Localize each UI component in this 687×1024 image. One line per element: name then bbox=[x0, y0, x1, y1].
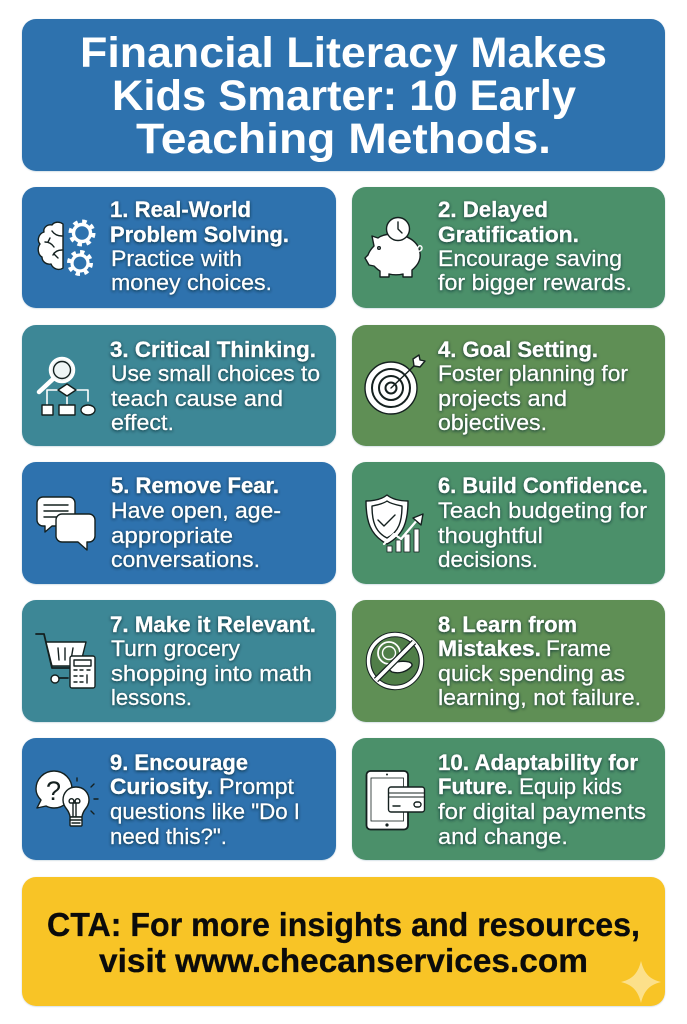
heading: Gratification. bbox=[438, 222, 579, 247]
panel: 2 delayed gratification bbox=[352, 187, 665, 308]
body text: thoughtful bbox=[438, 523, 543, 548]
body text bbox=[111, 361, 320, 435]
body text: lessons. bbox=[111, 685, 192, 710]
body text: questions like "Do I bbox=[110, 799, 300, 824]
body text: Frame bbox=[546, 636, 611, 661]
body text: Teach budgeting for bbox=[438, 498, 648, 523]
panel: 6 build confidence bbox=[352, 462, 665, 584]
body text: conversations. bbox=[111, 547, 260, 572]
panel: call to action bbox=[22, 877, 665, 1006]
heading: Problem Solving. bbox=[110, 222, 289, 247]
body text: Practice with bbox=[111, 246, 242, 271]
body text bbox=[111, 636, 312, 710]
panel: 9 encourage curiosity bbox=[22, 738, 336, 860]
body text: for digital payments bbox=[438, 799, 646, 824]
body text: Equip kids bbox=[519, 774, 622, 799]
body text bbox=[438, 636, 641, 710]
heading: 6. Build Confidence. bbox=[438, 473, 648, 498]
heading bbox=[438, 612, 577, 661]
title: Financial Literacy Makes bbox=[80, 29, 607, 77]
body text: Encourage saving bbox=[438, 246, 622, 271]
body text: appropriate bbox=[111, 523, 233, 548]
body text: money choices. bbox=[111, 270, 272, 295]
body text: and change. bbox=[438, 824, 568, 849]
body text: Use small choices to bbox=[111, 361, 320, 386]
heading: 10. Adaptability for bbox=[438, 750, 638, 775]
body text bbox=[438, 774, 646, 849]
title bbox=[80, 29, 607, 163]
body text: Prompt bbox=[219, 774, 295, 799]
title: Kids Smarter: 10 Early bbox=[112, 72, 576, 120]
panel: 4 goal setting bbox=[352, 325, 665, 446]
icon: question bubble and light bulb: ? bbox=[46, 776, 61, 806]
body text: effect. bbox=[111, 410, 174, 435]
icon: shield with check and bar chart bbox=[366, 495, 423, 552]
body text bbox=[111, 498, 281, 572]
icon: sparkle bbox=[621, 961, 661, 1003]
heading: 9. Encourage bbox=[110, 750, 248, 775]
call to action text: visit www.checanservices.com bbox=[99, 943, 588, 980]
icon: question bubble and light bulb bbox=[36, 771, 98, 826]
panel: 10 adaptability for future bbox=[352, 738, 665, 860]
title: Teaching Methods. bbox=[136, 115, 551, 163]
body text: objectives. bbox=[438, 410, 547, 435]
heading: 5. Remove Fear. bbox=[111, 473, 279, 498]
body text: projects and bbox=[438, 386, 567, 411]
body text bbox=[438, 361, 629, 435]
body text: need this?". bbox=[110, 824, 227, 849]
panel: 3 critical thinking bbox=[22, 325, 336, 446]
body text bbox=[438, 246, 632, 295]
panel: 5 remove fear bbox=[22, 462, 336, 584]
heading bbox=[438, 197, 579, 247]
icon: shopping cart and calculator bbox=[36, 634, 95, 688]
heading: 7. Make it Relevant. bbox=[110, 612, 316, 637]
panel: 7 make it relevant bbox=[22, 600, 336, 722]
panel: 1 real-world problem solving bbox=[22, 187, 336, 308]
panel: 8 learn from mistakes bbox=[352, 600, 665, 722]
heading: 8. Learn from bbox=[438, 612, 577, 637]
body text: shopping into math bbox=[111, 661, 312, 686]
heading: 3. Critical Thinking. bbox=[110, 337, 316, 362]
heading: 4. Goal Setting. bbox=[438, 337, 598, 362]
icon: prohibited coin in hand bbox=[368, 634, 422, 688]
heading: Mistakes. bbox=[438, 636, 541, 661]
body text bbox=[110, 774, 300, 849]
heading bbox=[110, 197, 289, 247]
body text: quick spending as bbox=[438, 661, 625, 686]
heading bbox=[438, 750, 638, 799]
icon: tablet and payment card bbox=[366, 771, 424, 830]
icon: target and arrow bbox=[365, 355, 425, 414]
body text: decisions. bbox=[438, 547, 538, 572]
heading: Curiosity. bbox=[110, 774, 213, 799]
body text bbox=[438, 498, 648, 572]
heading: Future. bbox=[438, 774, 513, 799]
heading: 2. Delayed bbox=[438, 197, 548, 222]
title banner bbox=[22, 19, 665, 171]
body text: Have open, age- bbox=[111, 498, 281, 523]
body text: teach cause and bbox=[111, 386, 283, 411]
heading: 1. Real-World bbox=[110, 197, 251, 222]
call to action text bbox=[47, 907, 640, 980]
body text: learning, not failure. bbox=[438, 685, 641, 710]
heading bbox=[110, 750, 248, 799]
body text: for bigger rewards. bbox=[438, 270, 632, 295]
call to action text: CTA: For more insights and resources, bbox=[47, 907, 640, 944]
icon: chat bubbles bbox=[37, 497, 95, 550]
body text bbox=[111, 246, 272, 295]
icon: magnifier and flowchart bbox=[39, 358, 95, 415]
icon: brain and gears bbox=[38, 222, 94, 274]
body text: Turn grocery bbox=[111, 636, 241, 661]
body text: Foster planning for bbox=[438, 361, 629, 386]
icon: piggy bank with clock bbox=[365, 218, 422, 277]
